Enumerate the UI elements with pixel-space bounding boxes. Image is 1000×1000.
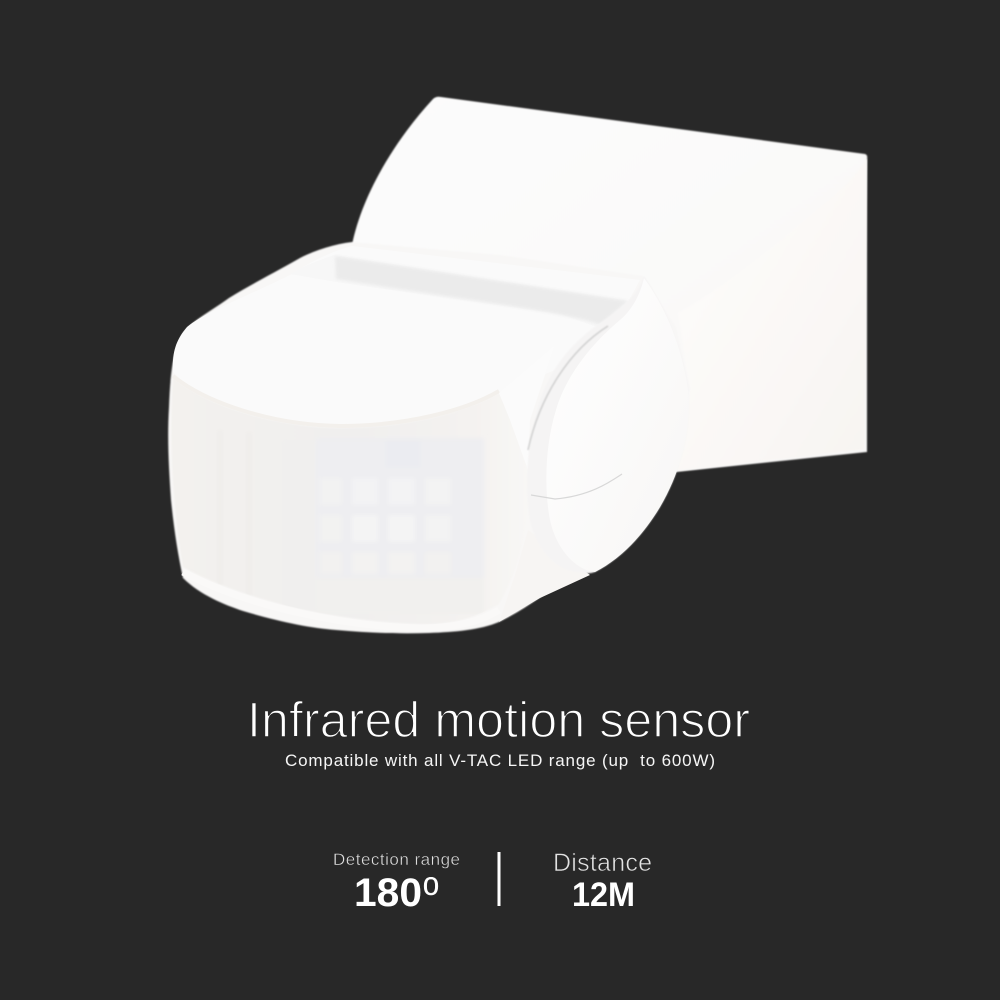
detection range label: Detection range: [333, 850, 460, 869]
product image: motion sensor: [168, 97, 867, 633]
detection range value: 180: [354, 871, 422, 915]
stat: detection range: [333, 850, 460, 915]
distance label: Distance: [553, 849, 652, 877]
wall mount top face: [352, 97, 867, 472]
dial face: [546, 278, 689, 572]
sensor head body: [168, 242, 690, 633]
lens: [172, 375, 500, 612]
dial inner shadow line: [528, 326, 608, 450]
stat: distance: [553, 849, 652, 914]
lens bottom rim: [183, 572, 499, 628]
title: Infrared motion sensor: [247, 692, 750, 748]
wall mount side face: [676, 158, 867, 471]
lens facet grid: [219, 430, 484, 614]
degree mark: 0: [423, 873, 439, 901]
distance value: 12M: [572, 876, 635, 914]
slot shadow band: [335, 256, 628, 325]
dial seam: [531, 474, 622, 499]
subtitle: Compatible with all V-TAC LED range (up to 600W): [285, 751, 715, 770]
neck between lens and dial: [499, 345, 555, 470]
lens top rim: [173, 376, 499, 426]
lower neck: [499, 530, 590, 622]
lens base: [171, 378, 528, 624]
head top plate: [173, 246, 640, 428]
head slot recess: [290, 255, 630, 327]
dial outer ring: [527, 276, 689, 574]
side dial: [527, 276, 689, 574]
divider: [498, 852, 500, 906]
